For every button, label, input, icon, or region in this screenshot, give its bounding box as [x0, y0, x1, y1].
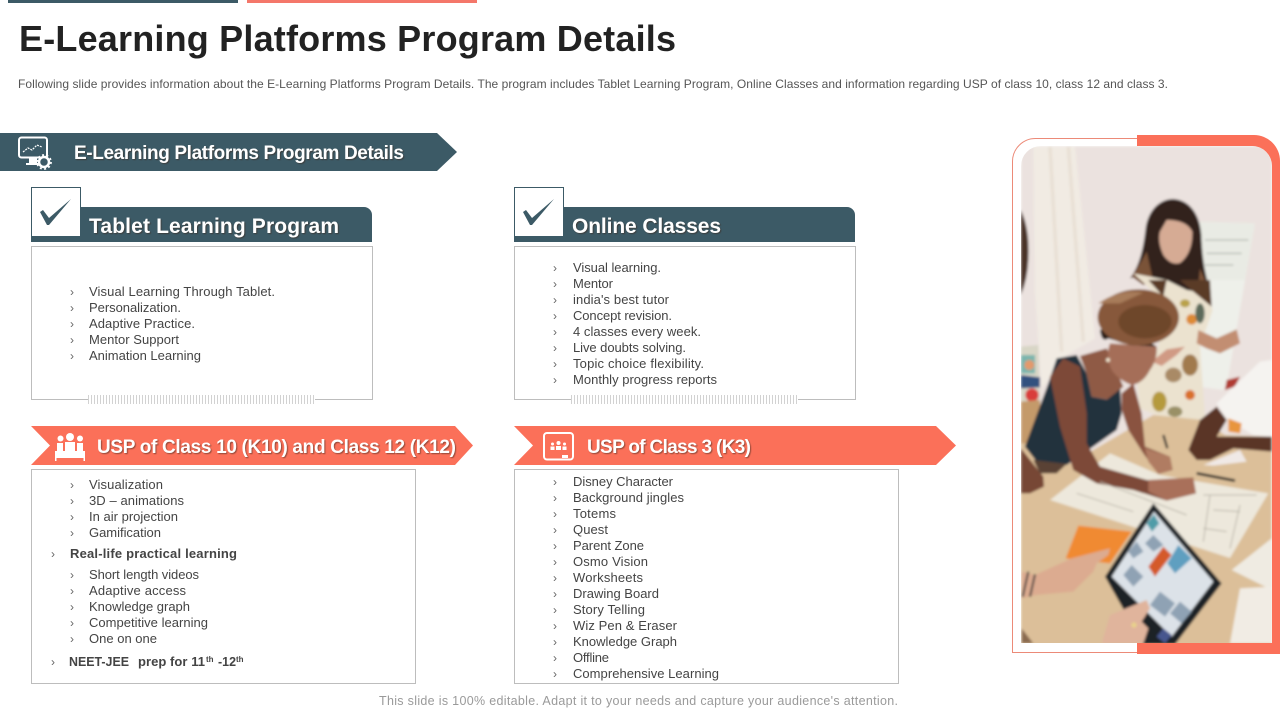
list items: Parent Zone	[573, 538, 644, 553]
list items: Wiz Pen & Eraser	[573, 618, 678, 633]
list items: Personalization.	[89, 300, 181, 315]
panel: USP class 3	[514, 426, 956, 684]
list items: ›	[70, 632, 74, 646]
tablet	[1105, 503, 1222, 644]
panel: tablet learning program	[31, 188, 372, 404]
list box	[514, 246, 856, 404]
list items: ›	[553, 667, 557, 681]
list items: Quest	[573, 522, 608, 537]
list items: 3D – animations	[89, 493, 184, 508]
list items: Visual Learning Through Tablet.	[89, 284, 275, 299]
list items: Live doubts solving.	[573, 340, 686, 355]
left skin	[1021, 448, 1044, 493]
list items: prep for 11	[138, 654, 205, 669]
icon: group board	[544, 433, 573, 460]
title: E-Learning Platforms Program Details	[19, 18, 676, 59]
list items: Knowledge graph	[89, 599, 190, 614]
ribbon heading	[31, 426, 473, 465]
list items: NEET-JEE	[69, 654, 129, 669]
list items	[70, 284, 275, 363]
list items	[553, 260, 718, 387]
icon: checkbox	[32, 188, 80, 236]
table	[1021, 414, 1272, 643]
section banner	[0, 133, 457, 171]
list items: ›	[553, 341, 557, 355]
list items: Mentor Support	[89, 332, 179, 347]
hair	[1100, 323, 1157, 347]
list items: ›	[553, 603, 557, 617]
list items: ›	[70, 301, 74, 315]
top accent bars	[8, 0, 477, 3]
seated woman near arm	[1050, 358, 1166, 501]
list items: ›	[553, 651, 557, 665]
list items: ›	[70, 317, 74, 331]
list items: Adaptive Practice.	[89, 316, 195, 331]
upper scene: curtain, standing woman	[1033, 147, 1255, 388]
list items: ›	[70, 510, 74, 524]
list items: ›	[70, 600, 74, 614]
ribbon heading: USP of Class 10 (K10) and Class 12 (K12)	[97, 437, 456, 458]
list items: ›	[553, 571, 557, 585]
list items	[553, 474, 719, 681]
list items: Totems	[573, 506, 616, 521]
list items: 4 classes every week.	[573, 324, 701, 339]
list items: Monthly progress reports	[573, 372, 718, 387]
list items: ›	[553, 373, 557, 387]
list items: ›	[553, 325, 557, 339]
list items: ›	[70, 494, 74, 508]
list items: Story Telling	[573, 602, 645, 617]
ribbon heading	[514, 426, 956, 465]
heading bar: tablet learning program	[31, 207, 372, 242]
whiteboard lower	[1201, 280, 1238, 390]
list items: ›	[553, 555, 557, 569]
paper	[1050, 453, 1268, 558]
photo frame	[1012, 135, 1280, 654]
list items: One on one	[89, 631, 157, 646]
list items: Visualization	[89, 477, 163, 492]
arms of standing woman	[1197, 329, 1240, 353]
list items: Gamification	[89, 525, 161, 540]
lower hand	[1102, 600, 1150, 643]
list items: ›	[553, 261, 557, 275]
list items: ›	[70, 568, 74, 582]
list items: ›	[553, 475, 557, 489]
list items: Comprehensive Learning	[573, 666, 719, 681]
list items: ›	[51, 655, 55, 669]
list items: Disney Character	[573, 474, 674, 489]
list box	[32, 470, 416, 684]
heading bar: online classes	[514, 207, 855, 242]
list items: In air projection	[89, 509, 178, 524]
list items: Real-life practical learning	[70, 546, 237, 561]
list items: india's best tutor	[573, 292, 670, 307]
list items: ›	[553, 635, 557, 649]
list box	[514, 470, 898, 684]
left hand	[1022, 548, 1110, 598]
list items: ›	[553, 619, 557, 633]
list items: ›	[553, 491, 557, 505]
list items: ›	[553, 309, 557, 323]
list items: ›	[553, 523, 557, 537]
list items: ›	[51, 547, 55, 561]
footer note: This slide is 100% editable. Adapt it to your needs and capture your audience's attention.	[379, 694, 898, 708]
seated woman top	[1025, 355, 1122, 465]
list items: Drawing Board	[573, 586, 659, 601]
wall lower right	[1225, 377, 1240, 390]
list items: Concept revision.	[573, 308, 672, 323]
list items	[51, 477, 244, 669]
list items: Visual learning.	[573, 260, 661, 275]
poster	[1021, 345, 1040, 405]
list items: Osmo Vision	[573, 554, 648, 569]
list items: ›	[553, 507, 557, 521]
list items: Knowledge Graph	[573, 634, 677, 649]
heading bar: online classes: Online Classes	[572, 215, 721, 238]
photo: students working around a table	[1021, 146, 1272, 680]
panel: online classes	[514, 188, 856, 404]
lower scene: paper detail, notebook, tablet, hands	[1022, 482, 1272, 644]
dress	[1133, 273, 1213, 423]
list items: Adaptive access	[89, 583, 186, 598]
list items: ›	[70, 478, 74, 492]
list items: ›	[553, 293, 557, 307]
seated woman chest	[1080, 348, 1123, 399]
list box	[32, 246, 372, 404]
list items: Short length videos	[89, 567, 200, 582]
list items: Offline	[573, 650, 609, 665]
list items: ›	[553, 357, 557, 371]
list items: ›	[70, 584, 74, 598]
list items: Mentor	[573, 276, 614, 291]
list items: Background jingles	[573, 490, 684, 505]
list items: th	[206, 655, 214, 664]
icon: monitor with gear	[19, 138, 51, 169]
list items: ›	[70, 616, 74, 630]
list items: -12	[218, 654, 236, 669]
list items: Competitive learning	[89, 615, 208, 630]
description text: Following slide provides information about the E-Learning Platforms Program Details. The program includes Tablet Learning Program, Online Classes and information regarding USP of class 10, class 12 and class 3.	[18, 77, 1168, 91]
list items: Worksheets	[573, 570, 644, 585]
list items: ›	[70, 285, 74, 299]
list items: ›	[553, 587, 557, 601]
list items: Topic choice flexibility.	[573, 356, 704, 371]
seated woman far arm	[1119, 382, 1166, 459]
panel: USP class 10 and 12	[31, 426, 473, 684]
list items: Animation Learning	[89, 348, 201, 363]
heading bar: tablet learning program: Tablet Learning Program	[89, 215, 339, 238]
icon: checkbox	[514, 188, 564, 236]
ribbon heading: USP of Class 3 (K3)	[587, 437, 751, 458]
head at left edge	[1021, 210, 1029, 295]
list items: ›	[553, 539, 557, 553]
list items: ›	[70, 333, 74, 347]
list items: ›	[70, 526, 74, 540]
list items: ›	[70, 349, 74, 363]
banner heading: E-Learning Platforms Program Details	[74, 143, 404, 164]
icon: classroom students	[55, 433, 85, 461]
list items: ›	[553, 277, 557, 291]
right person	[1217, 360, 1272, 437]
face	[1108, 343, 1157, 385]
list items: th	[236, 655, 244, 664]
middle scene: table, seated woman, right-hand person	[1021, 210, 1272, 680]
